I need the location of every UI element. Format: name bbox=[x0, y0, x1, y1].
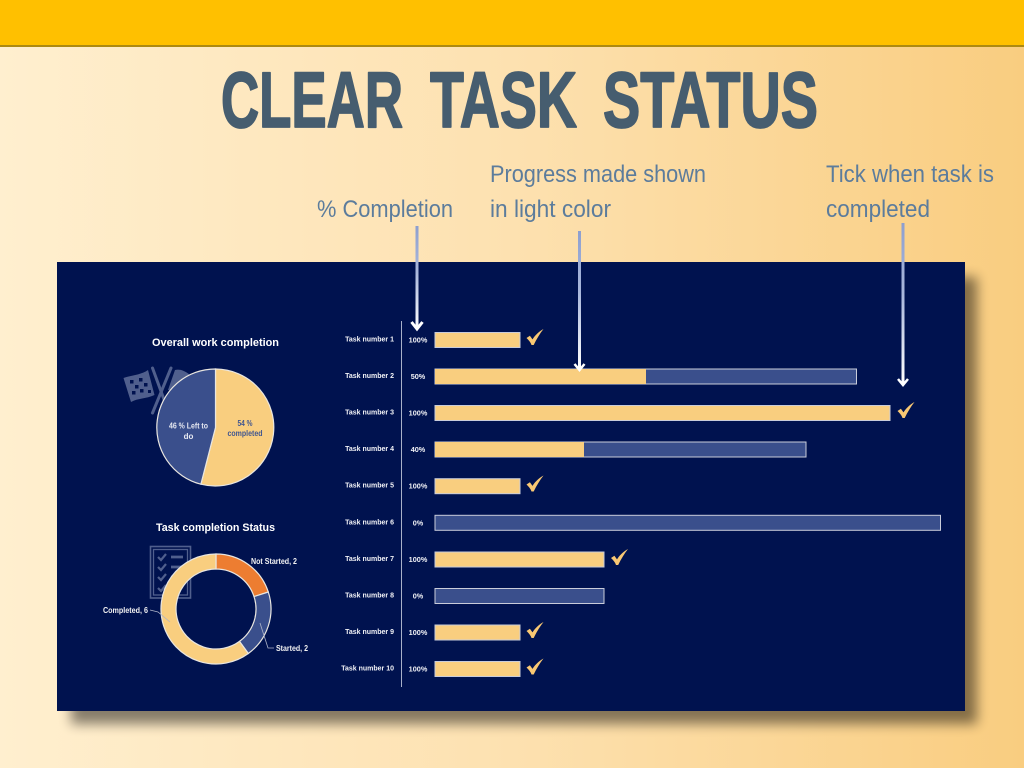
task labels: Task number 8 bbox=[345, 592, 394, 600]
completion percentages: 40% bbox=[411, 445, 426, 454]
task labels: Task number 6 bbox=[345, 519, 394, 526]
pie label: left to do: do bbox=[184, 432, 193, 441]
completion percentages: 100% bbox=[409, 336, 428, 344]
task labels: Task number 2 bbox=[345, 373, 394, 380]
heading: task completion status: Task completion Status bbox=[156, 522, 275, 534]
title bbox=[221, 55, 818, 144]
bar: task 9 bbox=[435, 625, 520, 640]
pie label: left to do bbox=[169, 422, 208, 441]
bar: task 6 bbox=[435, 515, 940, 530]
bar: task 2 remaining bbox=[435, 369, 856, 384]
annotation: progress made bbox=[490, 161, 706, 223]
bar: task 1 bbox=[435, 332, 520, 348]
panel shadow bbox=[71, 277, 977, 724]
heading: overall work completion: Overall work completion bbox=[152, 337, 279, 349]
chart: task progress bars bbox=[435, 332, 940, 676]
annotation: tick when completed bbox=[826, 161, 994, 223]
top banner bbox=[0, 0, 1024, 47]
task labels: Task number 9 bbox=[345, 629, 394, 636]
chart: overall completion pie bbox=[157, 369, 274, 486]
panel: dashboard bbox=[57, 262, 965, 711]
annotation: progress made: in light color bbox=[490, 196, 611, 223]
completion percentages: 50% bbox=[411, 372, 426, 381]
arrow: to progress bar bbox=[574, 231, 584, 370]
icon: completion ticks bbox=[526, 329, 914, 674]
task labels: Task number 1 bbox=[345, 336, 394, 344]
task labels: Task number 7 bbox=[345, 556, 394, 563]
task labels: Task number 10 bbox=[341, 666, 394, 673]
annotation: tick when completed: Tick when task is bbox=[826, 161, 994, 188]
completion percentages: 0% bbox=[413, 592, 424, 600]
axis line bbox=[400, 321, 402, 687]
bar: task 7 bbox=[435, 552, 604, 567]
bar: task 10 bbox=[435, 662, 520, 676]
annotation: % completion: % Completion bbox=[317, 196, 453, 223]
completion percentages: 100% bbox=[409, 665, 428, 674]
task labels: Task number 4 bbox=[345, 446, 394, 453]
icon: checkered flags bbox=[124, 368, 190, 413]
donut labels: Started, 2 bbox=[276, 644, 308, 653]
completion percentages: 100% bbox=[409, 482, 428, 491]
donut labels: Completed, 6 bbox=[103, 606, 148, 615]
completion percentages: 0% bbox=[413, 518, 424, 527]
pie label: completed: completed bbox=[228, 429, 263, 438]
bar: task 4 remaining bbox=[435, 442, 806, 457]
arrow: to tick bbox=[898, 223, 908, 385]
task labels bbox=[341, 336, 394, 673]
icon: checklist clipboard bbox=[150, 546, 190, 598]
bar: task 8 bbox=[435, 588, 604, 604]
bar: task 3 bbox=[435, 406, 890, 420]
pie label: left to do: 46 % Left to bbox=[169, 422, 208, 430]
donut labels: Not Started, 2 bbox=[251, 557, 297, 566]
completion percentages bbox=[409, 336, 428, 674]
task labels: Task number 3 bbox=[345, 410, 394, 416]
bar: task 2 progress bbox=[435, 369, 646, 384]
pie label: completed bbox=[228, 419, 263, 438]
chart: task status donut bbox=[161, 554, 271, 664]
completion percentages: 100% bbox=[409, 408, 428, 418]
completion percentages: 100% bbox=[409, 628, 428, 637]
bar: task 5 bbox=[435, 479, 520, 494]
title: STATUS bbox=[603, 55, 818, 144]
completion percentages: 100% bbox=[409, 555, 428, 564]
annotation: progress made: Progress made shown bbox=[490, 161, 706, 188]
task labels: Task number 5 bbox=[345, 483, 394, 490]
pie label: completed: 54 % bbox=[238, 419, 252, 428]
title: TASK bbox=[430, 55, 577, 144]
bar: task 4 progress bbox=[435, 442, 584, 457]
annotation: tick when completed: completed bbox=[826, 196, 930, 223]
donut labels bbox=[103, 557, 308, 653]
arrow: to percent completion bbox=[412, 226, 422, 329]
donut leader lines bbox=[150, 610, 274, 648]
title: CLEAR bbox=[221, 55, 403, 144]
